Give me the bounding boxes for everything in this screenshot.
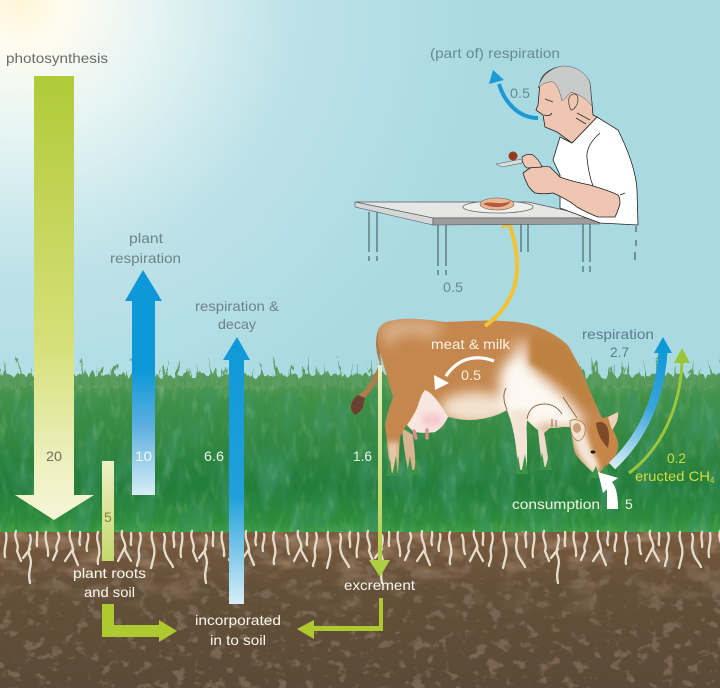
man side dashes [635,226,636,260]
table [355,202,600,275]
sky background [0,0,720,400]
value: excrement: 1.6 [353,448,372,464]
label: incorporated in to soil: incorporated [195,612,281,628]
arrow: consumption [598,472,618,509]
cow far hind leg [402,428,415,470]
plate of meat [463,198,533,213]
label: respiration and decay: respiration & [195,298,280,314]
man hair [538,66,592,106]
arrow: plant respiration [125,270,162,495]
man neck and head [536,67,597,143]
plant roots [0,528,720,596]
cow head marking [596,422,609,448]
label: plant roots and soil [73,565,146,600]
label: consumption: consumption [512,496,600,512]
cow leg lowers [512,410,530,472]
cow brown neck stripe [530,336,600,412]
label: cow respiration: 2.7 [610,344,629,360]
arrow: meat and milk to plate [485,215,517,326]
label: cow respiration: respiration [582,326,654,342]
table front edge [433,218,600,225]
label: excrement: excrement [344,577,415,593]
label: meat and milk: meat & milk [431,336,511,352]
arrow: respiration and decay [223,337,250,604]
cow ear [570,420,585,441]
grass over hooves [386,452,610,478]
cow teats [414,430,427,438]
soil band [0,532,720,688]
label: eructed methane: 4 [710,476,715,485]
arrow: human respiration [489,70,538,118]
grass band [0,352,720,535]
label: plant respiration: plant [129,230,163,246]
value: plant roots: 5 [104,509,112,525]
label: plant roots and soil: plant roots [73,565,146,581]
cow contour lines [504,388,577,427]
value: human respiration: 0.5 [510,85,530,101]
cow udder blush [421,413,443,427]
meat on fork [508,152,518,160]
man face details [544,99,590,124]
man forearm and hand [523,166,620,217]
label: eructed methane: eructed CH [635,468,710,484]
arrow: photosynthesis [15,76,94,520]
arrow: eructed methane [629,348,690,473]
label: incorporated in to soil: in to soil [210,632,266,648]
arrow: excrement [369,365,390,577]
label: plant respiration [110,230,181,266]
man ear [569,94,578,110]
cow tail [351,330,382,415]
cow udder [407,390,448,433]
value: photosynthesis: 20 [46,448,62,464]
table legs [369,212,590,275]
arrow: cow respiration [612,337,672,466]
label: respiration and decay [195,298,280,332]
cow far ear [608,412,618,430]
label: eructed methane: 0.2 [667,450,686,466]
cow inner ear [573,423,581,433]
man fork hand [522,154,542,168]
label: eructed methane [635,450,715,485]
value: respiration and decay: 6.6 [204,448,224,464]
label: respiration and decay: decay [218,316,256,332]
cow tail tip [351,395,365,415]
value: cow loop: 0.5 [461,367,481,383]
arrow: excrement to soil [297,598,383,639]
cow eye [590,450,596,454]
value: consumption: 5 [625,496,633,512]
label: part of respiration: (part of) respiration [430,45,560,61]
label: incorporated in to soil [195,612,281,648]
arrow: roots to soil [102,604,177,642]
man eating [496,66,638,260]
knife [496,159,522,167]
cow face [570,425,600,478]
man sleeve line [587,133,625,195]
value: meat and milk: 0.5 [443,279,463,295]
man shirt [553,117,638,225]
cow colour markings [380,320,620,478]
label: plant respiration: respiration [110,250,181,266]
table left edge [355,202,433,225]
label: plant roots and soil: and soil [84,584,135,600]
bar: plant roots carbon [102,461,114,561]
value: plant respiration: 10 [135,448,152,464]
table surface [355,202,600,218]
cow [351,319,620,478]
arrow: white loop in cow [434,358,494,390]
label: cow respiration [582,326,654,360]
cow body [378,319,618,475]
label: photosynthesis: photosynthesis [6,50,108,66]
